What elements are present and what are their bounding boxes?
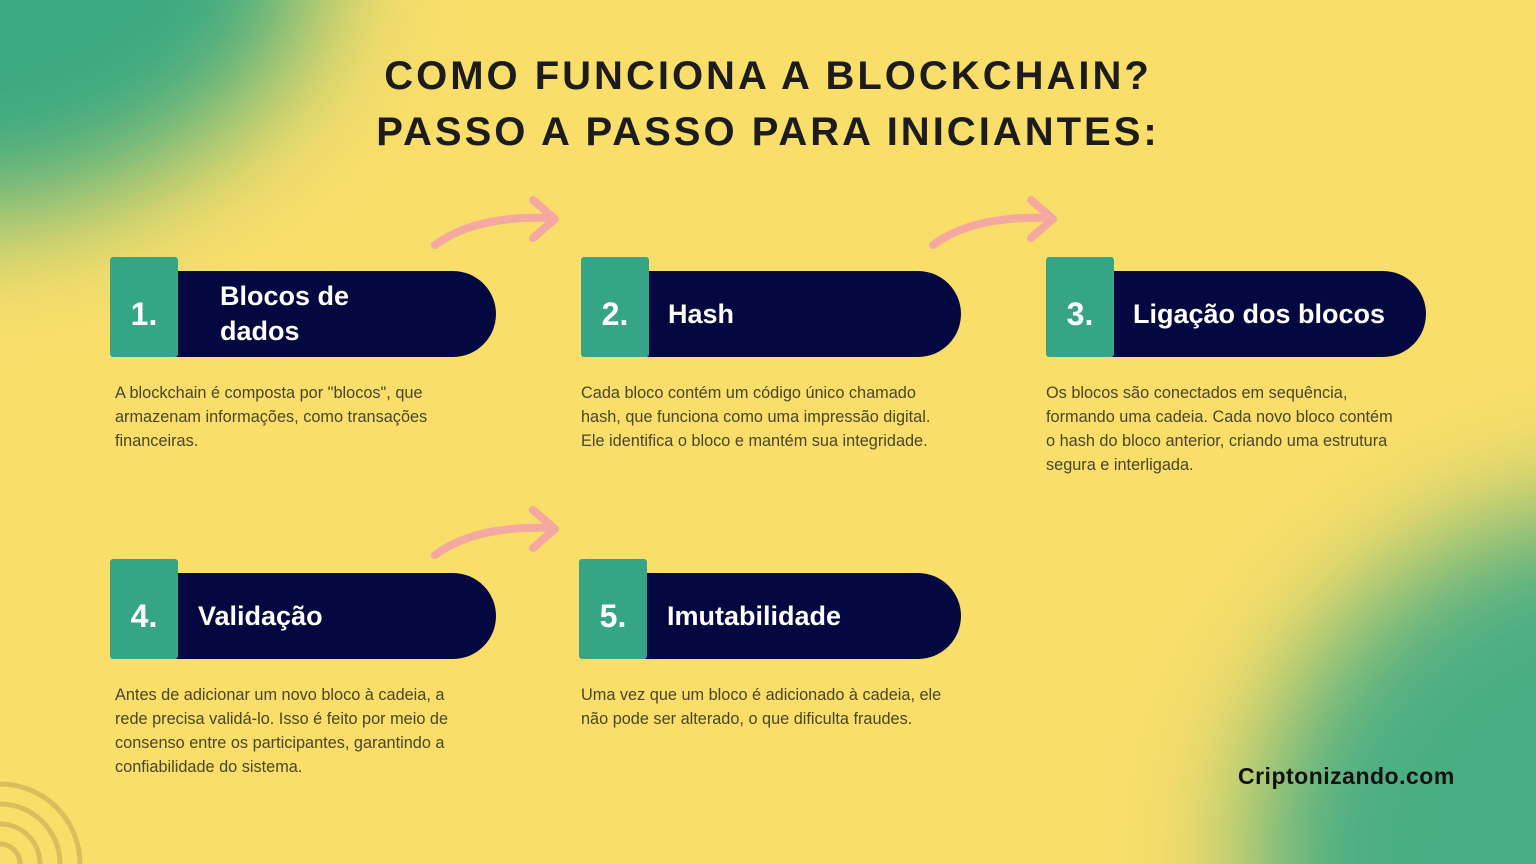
step 5: Imutabilidade bbox=[667, 600, 841, 630]
text 2: hash, que funciona como uma impressão digital. bbox=[581, 408, 930, 426]
step 5 bbox=[579, 559, 961, 659]
step 1 bbox=[110, 257, 496, 357]
text 2: Cada bloco contém um código único chamado bbox=[581, 384, 916, 402]
text 3: formando uma cadeia. Cada novo bloco contém bbox=[1046, 408, 1393, 426]
arrow 2 bbox=[929, 196, 1057, 249]
text 1: financeiras. bbox=[115, 432, 198, 450]
title: PASSO A PASSO PARA INICIANTES: bbox=[376, 110, 1160, 154]
step 4: Validação bbox=[198, 600, 323, 630]
text 1: armazenam informações, como transações bbox=[115, 408, 427, 426]
text 2 bbox=[581, 384, 930, 450]
step 1: Blocos de bbox=[220, 281, 349, 311]
text 5 bbox=[581, 686, 941, 728]
text 5: não pode ser alterado, o que dificulta fraudes. bbox=[581, 710, 912, 728]
text 4 bbox=[115, 686, 448, 776]
step 3: 3. bbox=[1067, 296, 1093, 332]
text 1: A blockchain é composta por "blocos", que bbox=[115, 384, 423, 402]
step 3: Ligação dos blocos bbox=[1133, 298, 1385, 328]
text 4: rede precisa validá-lo. Isso é feito por meio de bbox=[115, 710, 448, 728]
text 5: Uma vez que um bloco é adicionado à cadeia, ele bbox=[581, 686, 941, 704]
step 1: 1. bbox=[131, 296, 157, 332]
text 4: Antes de adicionar um novo bloco à cadeia, a bbox=[115, 686, 444, 704]
step 4: 4. bbox=[131, 598, 157, 634]
text 3: Os blocos são conectados em sequência, bbox=[1046, 384, 1347, 402]
step 3 bbox=[1046, 257, 1426, 357]
arrow 1 bbox=[431, 196, 559, 249]
step 2: Hash bbox=[668, 298, 734, 328]
text 3: segura e interligada. bbox=[1046, 456, 1194, 474]
title: COMO FUNCIONA A BLOCKCHAIN? bbox=[384, 54, 1152, 98]
text 3: o hash do bloco anterior, criando uma estrutura bbox=[1046, 432, 1387, 450]
step 4 bbox=[110, 559, 496, 659]
step 2 bbox=[581, 257, 961, 357]
step 1: dados bbox=[220, 316, 300, 346]
arrow 3 bbox=[431, 506, 559, 559]
footer brand: Criptonizando.com bbox=[1238, 763, 1455, 789]
text 4: confiabilidade do sistema. bbox=[115, 758, 302, 776]
step 2: 2. bbox=[602, 296, 628, 332]
text 2: Ele identifica o bloco e mantém sua integridade. bbox=[581, 432, 928, 450]
text 1 bbox=[115, 384, 427, 450]
step 5: 5. bbox=[600, 598, 626, 634]
text 4: consenso entre os participantes, garantindo a bbox=[115, 734, 444, 752]
title bbox=[376, 54, 1160, 154]
text 3 bbox=[1046, 384, 1393, 474]
